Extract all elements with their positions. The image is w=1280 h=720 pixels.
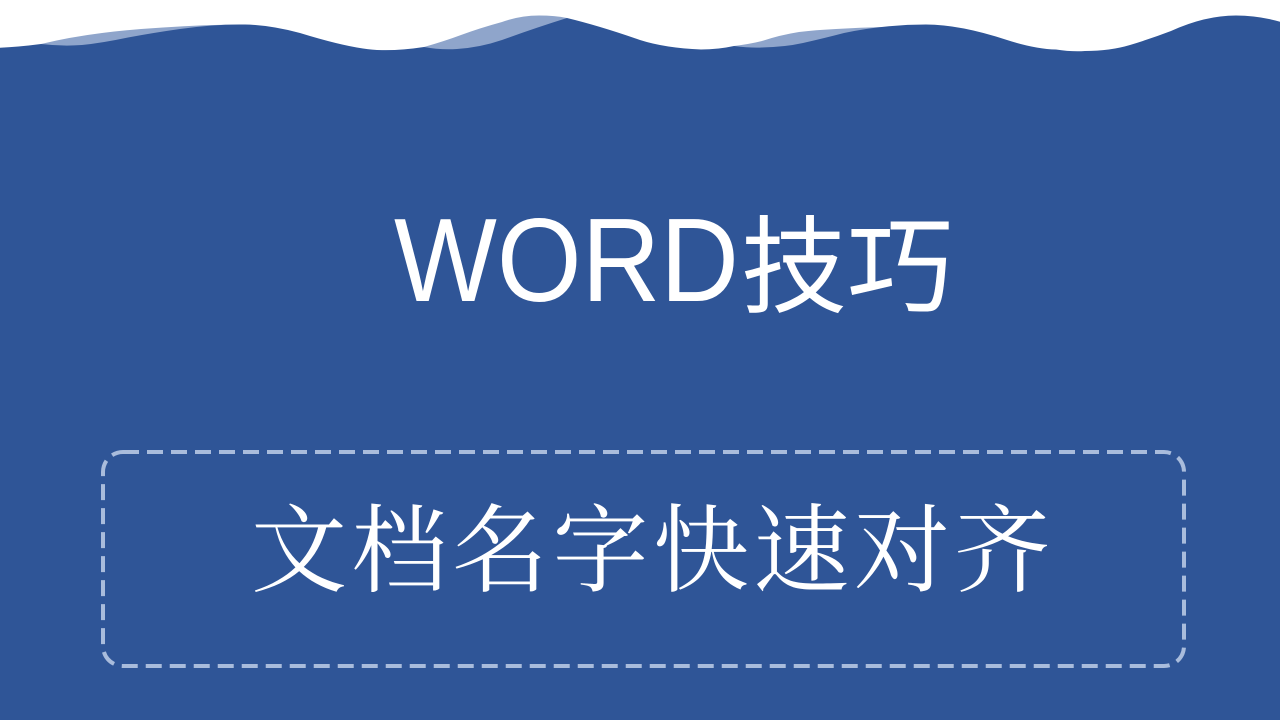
subtitle text: 文档名字快速对齐 xyxy=(251,498,1055,605)
subtitle box xyxy=(103,452,1184,666)
wave highlights xyxy=(41,16,885,55)
dashed frame xyxy=(103,452,1184,666)
title xyxy=(394,182,953,336)
title: 技巧 xyxy=(741,182,953,336)
title: WORD xyxy=(394,194,739,327)
